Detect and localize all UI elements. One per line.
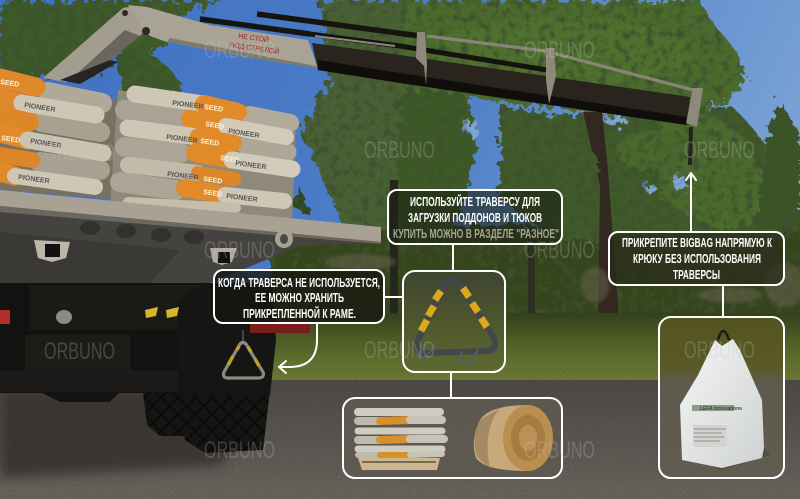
sack labels: PIONEER bbox=[166, 134, 198, 145]
watermarks bbox=[44, 37, 755, 464]
arrow to stored traverse bbox=[279, 323, 317, 373]
callout: storage on frame: КОГДА ТРАВЕРСА НЕ ИСПОЛЬЗУЕТСЯ, bbox=[218, 276, 380, 290]
warning text on boom: ПОД СТРЕЛОЙ bbox=[229, 40, 280, 56]
sack labels: SEED bbox=[203, 176, 223, 186]
warning text on boom bbox=[229, 31, 280, 56]
watermarks: ORBUNO bbox=[524, 237, 595, 264]
watermarks: ORBUNO bbox=[684, 137, 755, 164]
watermarks: ORBUNO bbox=[524, 437, 595, 464]
callout: storage on frame bbox=[214, 270, 384, 323]
icon: bigbag: LEFA Innovations bbox=[700, 406, 742, 412]
sack labels: SEED bbox=[204, 104, 224, 114]
watermarks: ORBUNO bbox=[44, 338, 115, 365]
truck bed bbox=[0, 190, 381, 265]
hydraulic cylinders bbox=[200, 14, 693, 90]
icon: bigbag bbox=[680, 331, 770, 470]
panel: bigbag bbox=[659, 317, 784, 478]
callout: attach bigbag bbox=[609, 232, 784, 285]
grass verge bbox=[270, 313, 800, 381]
sack labels: SEED bbox=[205, 121, 225, 131]
sack labels: PIONEER bbox=[18, 174, 50, 185]
truck chassis and underside bbox=[0, 205, 381, 453]
sack labels: PIONEER bbox=[228, 128, 260, 140]
sack labels: PIONEER bbox=[167, 171, 199, 182]
watermarks: ORBUNO bbox=[364, 137, 435, 164]
callout: use traverse: КУПИТЬ МОЖНО В РАЗДЕЛЕ "РАЗНОЕ" bbox=[393, 227, 559, 241]
sack labels: SEED bbox=[203, 189, 223, 199]
crane bbox=[43, 5, 703, 165]
warning text on boom: НЕ СТОЙ bbox=[238, 31, 270, 44]
watermarks: ORBUNO bbox=[204, 237, 275, 264]
callout: storage on frame: ЕЕ МОЖНО ХРАНИТЬ bbox=[255, 291, 344, 305]
background trees bbox=[0, 0, 800, 340]
sack labels: PIONEER bbox=[235, 160, 267, 171]
crane boom grey section bbox=[128, 5, 318, 68]
callout: storage on frame: ПРИКРЕПЛЕННОЙ К РАМЕ. bbox=[243, 306, 356, 321]
tree trunks bbox=[390, 112, 620, 335]
icon: traverse triangle bbox=[416, 280, 495, 364]
callout: use traverse bbox=[388, 190, 562, 244]
icon: pallet of sacks bbox=[358, 412, 444, 470]
watermarks: ORBUNO bbox=[524, 37, 595, 64]
sack labels: SEED bbox=[0, 79, 20, 89]
arrow up to hook bbox=[686, 173, 696, 232]
callout: use traverse: ИСПОЛЬЗУЙТЕ ТРАВЕРСУ ДЛЯ bbox=[410, 194, 540, 209]
callout: attach bigbag: ТРАВЕРСЫ bbox=[673, 268, 720, 282]
boom clamps bbox=[416, 32, 427, 85]
sack labels bbox=[0, 79, 267, 204]
watermarks: ORBUNO bbox=[364, 337, 435, 364]
crane column arm bbox=[43, 6, 148, 82]
sack labels: PIONEER bbox=[30, 138, 62, 150]
storage traverse on truck bbox=[224, 330, 263, 378]
connector lines bbox=[384, 244, 723, 398]
sack labels: PIONEER bbox=[24, 102, 56, 114]
sky gaps through the trees bbox=[463, 114, 686, 193]
sack stacks on the bed bbox=[0, 72, 296, 225]
hook chain bbox=[690, 127, 691, 165]
sack labels: SEED bbox=[1, 135, 21, 145]
crane extension beam bbox=[312, 43, 690, 125]
sack labels: PIONEER bbox=[226, 193, 258, 204]
watermarks: ORBUNO bbox=[44, 140, 115, 167]
sack labels: PIONEER bbox=[172, 100, 204, 111]
callout: use traverse: ЗАГРУЗКИ ПОДДОНОВ И ТЮКОВ bbox=[408, 211, 542, 225]
sack labels: SEED bbox=[220, 155, 240, 165]
ground bbox=[0, 380, 800, 499]
panel: pallet and bale bbox=[343, 398, 562, 478]
right stack of sacks bbox=[110, 90, 296, 225]
panel: traverse bbox=[403, 271, 505, 372]
watermarks: ORBUNO bbox=[204, 437, 275, 464]
watermarks: ORBUNO bbox=[204, 37, 275, 64]
icon: hay bale bbox=[474, 405, 553, 471]
left stack of sacks bbox=[0, 72, 128, 200]
sack labels: SEED bbox=[200, 138, 220, 148]
ground shading bbox=[0, 380, 800, 499]
foliage over trunk bbox=[522, 130, 684, 191]
rocky hillside bbox=[324, 254, 800, 307]
watermarks: ORBUNO bbox=[684, 337, 755, 364]
